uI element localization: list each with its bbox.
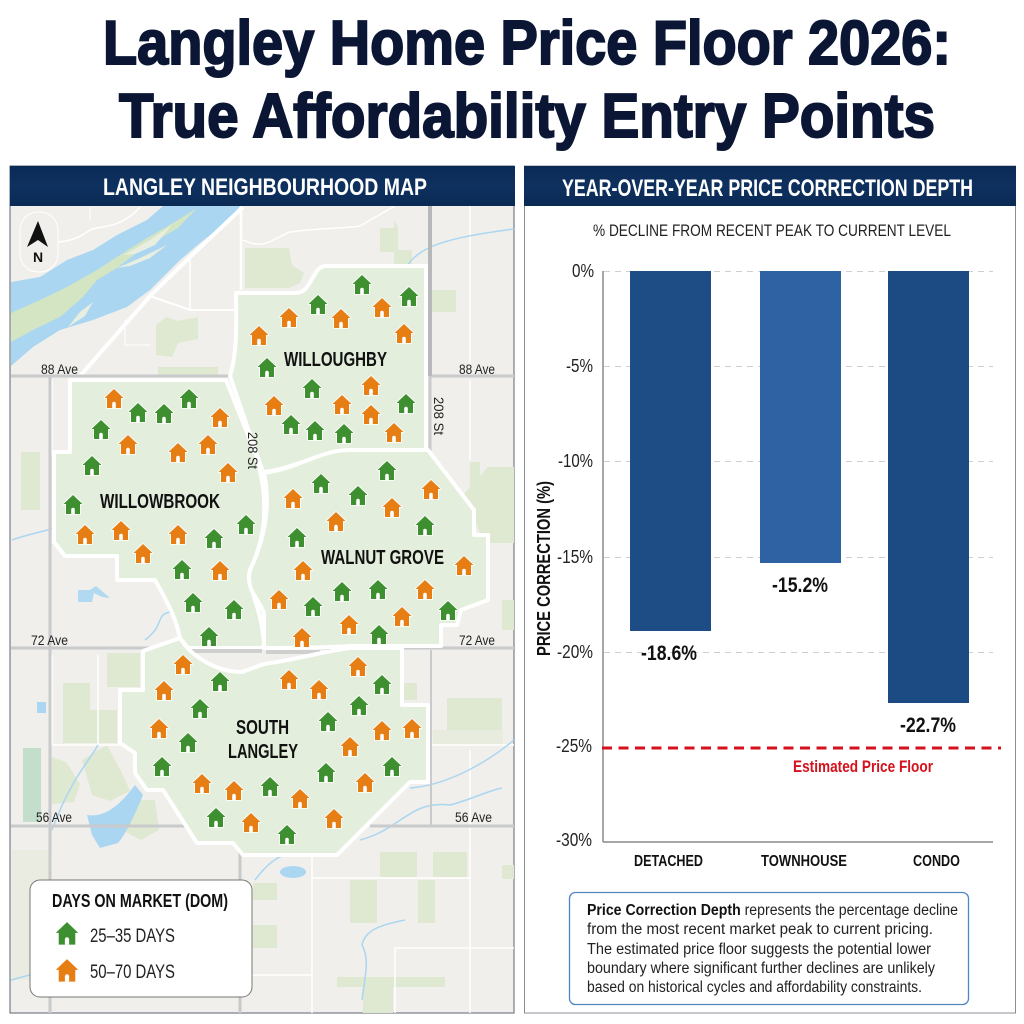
estimated price floor line: Estimated Price Floor bbox=[793, 758, 933, 776]
road labels: 208 St bbox=[431, 397, 447, 435]
bar chart bbox=[534, 261, 1001, 870]
neighbourhood labels: WILLOUGHBY bbox=[284, 349, 387, 371]
map heading: LANGLEY NEIGHBOURHOOD MAP bbox=[103, 174, 427, 201]
road labels: 208 St bbox=[245, 432, 261, 469]
chart subtitle: % DECLINE FROM RECENT PEAK TO CURRENT LEVEL bbox=[593, 222, 951, 240]
icon: north arrow: N bbox=[33, 249, 43, 265]
creeks bbox=[11, 229, 514, 1000]
axis tick labels bbox=[556, 261, 594, 850]
bar: detached: -18.6% bbox=[641, 642, 697, 665]
bar: condo: CONDO bbox=[913, 853, 960, 870]
panel: price correction chart bbox=[524, 166, 1016, 1013]
houses: South Langley bbox=[150, 655, 422, 844]
bar: condo bbox=[888, 271, 969, 870]
neighbourhood labels: WILLOWBROOK bbox=[100, 491, 220, 513]
white local roads bbox=[20, 206, 514, 1013]
neighbourhood labels bbox=[100, 349, 444, 763]
legend item: 25–35 days: 25–35 DAYS bbox=[90, 926, 175, 947]
bar: townhouse: -15.2% bbox=[772, 574, 828, 597]
legend item: 25–35 days bbox=[56, 922, 175, 947]
icon: north arrow bbox=[20, 212, 58, 272]
axis tick labels: -10% bbox=[558, 451, 593, 471]
neighbourhood: South Langley bbox=[120, 638, 428, 855]
road labels: 56 Ave bbox=[455, 809, 492, 825]
road labels: 72 Ave bbox=[31, 632, 68, 648]
map base: land, parks, river and roads bbox=[11, 206, 514, 1013]
bar: detached: DETACHED bbox=[634, 853, 703, 870]
bar: townhouse bbox=[760, 271, 847, 870]
legend: DAYS ON MARKET (DOM) bbox=[52, 891, 228, 911]
callout: definition note: The estimated price floor suggests the potential lower bbox=[587, 941, 931, 958]
houses: Willowbrook bbox=[64, 389, 256, 646]
72 Ave strip between districts bbox=[192, 651, 320, 652]
axis tick labels: 0% bbox=[572, 261, 594, 281]
teal marsh strip bbox=[23, 748, 41, 822]
callout: definition note: from the most recent market peak to current pricing. bbox=[587, 921, 933, 938]
axis tick labels: -30% bbox=[556, 830, 592, 850]
axis tick labels: -15% bbox=[557, 547, 593, 567]
axis tick labels: -25% bbox=[556, 736, 592, 756]
neighbourhood: Willoughby bbox=[230, 266, 426, 472]
bar: townhouse: TOWNHOUSE bbox=[761, 853, 847, 870]
axis tick labels: -5% bbox=[566, 356, 593, 376]
y-axis title: PRICE CORRECTION (%) bbox=[534, 481, 554, 656]
callout: definition note: boundary where significant further declines are unlikely bbox=[587, 960, 935, 977]
title bbox=[103, 9, 951, 151]
neighbourhood labels: LANGLEY bbox=[228, 741, 298, 763]
title: Langley Home Price Floor 2026: bbox=[103, 9, 951, 78]
neighbourhood: Willowbrook bbox=[54, 380, 264, 648]
callout: definition note bbox=[570, 892, 968, 1004]
bar: detached bbox=[630, 271, 711, 870]
road labels: 56 Ave bbox=[36, 809, 72, 825]
title: True Affordability Entry Points bbox=[119, 82, 935, 151]
neighbourhood: Walnut Grove bbox=[249, 450, 488, 648]
callout: definition note: Price Correction Depth represents the percentage decline bbox=[587, 902, 958, 919]
callout: definition note: based on historical cycles and affordability constraints. bbox=[587, 979, 922, 996]
legend item: 50–70 days bbox=[56, 959, 175, 983]
axis tick labels: -20% bbox=[557, 642, 593, 662]
grey arterial roads bbox=[11, 206, 514, 1013]
road labels: 72 Ave bbox=[459, 632, 495, 648]
legend bbox=[30, 880, 252, 997]
neighbourhood labels: SOUTH bbox=[236, 717, 289, 739]
bar: condo: -22.7% bbox=[900, 714, 956, 737]
chart heading bbox=[524, 166, 1016, 206]
panel: neighbourhood map bbox=[10, 166, 515, 1013]
neighbourhood labels: WALNUT GROVE bbox=[321, 547, 444, 569]
road labels: 88 Ave bbox=[459, 361, 495, 377]
legend item: 50–70 days: 50–70 DAYS bbox=[90, 962, 175, 983]
map heading bbox=[10, 166, 515, 206]
houses: Walnut Grove bbox=[270, 461, 474, 647]
road labels: 88 Ave bbox=[41, 361, 78, 377]
road labels bbox=[31, 361, 495, 825]
river bbox=[11, 206, 240, 366]
houses: Willoughby bbox=[250, 275, 418, 443]
